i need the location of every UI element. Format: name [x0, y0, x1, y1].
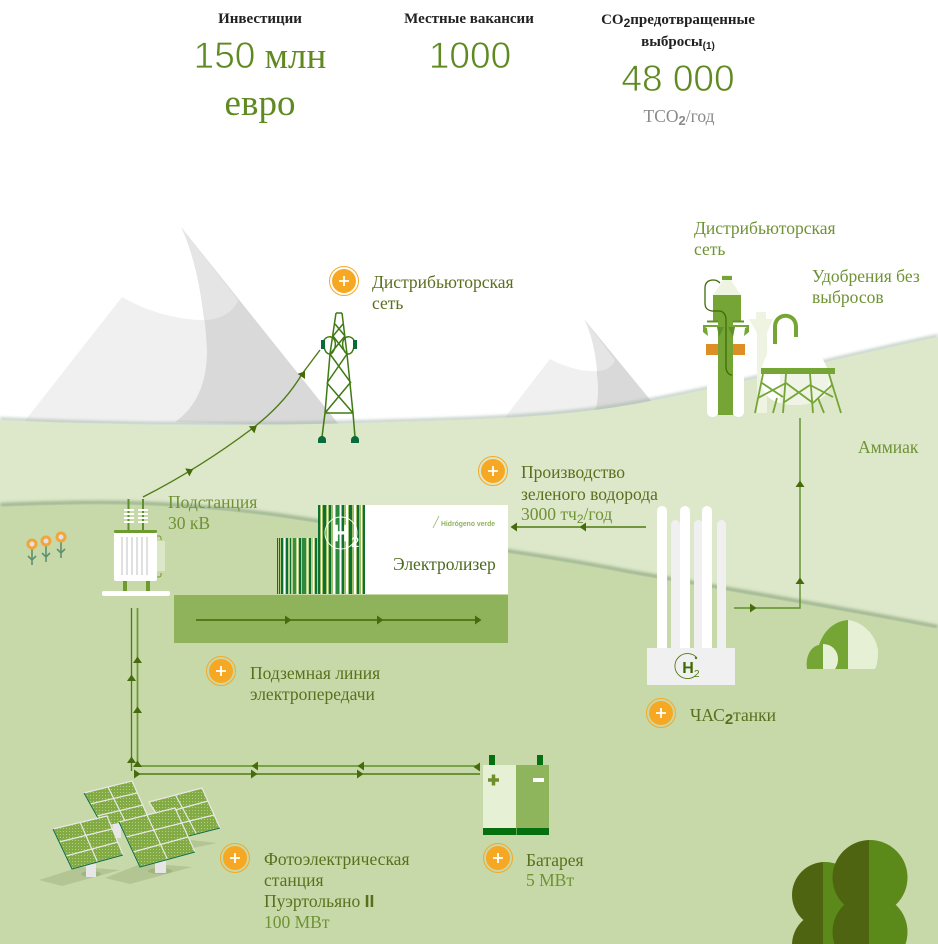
- stat: local jobs: Местные вакансии: [404, 11, 534, 27]
- icon: ammonia column: [703, 275, 749, 417]
- stat: avoided emissions: 2: [678, 113, 686, 128]
- stat: avoided emissions: [601, 12, 755, 128]
- icon: H2 on stripes: 2: [351, 534, 359, 551]
- label: underground line: [250, 663, 380, 704]
- label: battery: [526, 850, 584, 890]
- plus button: underground line: [206, 656, 236, 686]
- mountain: large: [24, 227, 340, 426]
- stat: avoided emissions: (1): [703, 41, 715, 52]
- label: solar plant: [264, 849, 410, 932]
- panel: underground strip: [174, 595, 508, 643]
- stat: avoided emissions: 2: [624, 16, 631, 30]
- icon: bush: [807, 620, 878, 669]
- label: tanks: танки: [733, 705, 776, 725]
- front panel: [119, 808, 195, 874]
- arrow: tanks to ammonia plant: [734, 418, 804, 612]
- label: fertilisers: выбросов: [812, 287, 884, 307]
- label: battery: Батарея: [526, 850, 584, 870]
- icon: H2 on stripes: [325, 517, 359, 551]
- label: battery: 5 МВт: [526, 870, 574, 890]
- icon: trees: [792, 840, 908, 944]
- label: ammonia: Аммиак: [858, 437, 919, 457]
- dark hill: [0, 503, 938, 944]
- icon: H2 on stripes: H: [333, 520, 349, 546]
- icon: battery: [483, 755, 549, 835]
- plus button: battery: [484, 844, 512, 872]
- plus button: hydrogen production: [478, 456, 508, 486]
- icon: hydrogen tanks: H: [682, 660, 694, 677]
- stat: avoided emissions: выбросы: [641, 34, 703, 50]
- label: distribution grid (right): сеть: [694, 239, 725, 259]
- icon: hydrogen tanks: 2: [694, 669, 700, 680]
- arrow: electrolyser to tanks: [510, 522, 646, 532]
- icon: flowers: [26, 532, 66, 565]
- back panel: [84, 781, 148, 838]
- icon: ammonia reactor: [749, 312, 841, 413]
- label: substation: Подстанция: [168, 492, 257, 512]
- label: substation: [168, 492, 257, 533]
- label: hydrogen production: 2: [577, 512, 584, 526]
- stat: avoided emissions: 48 000: [621, 58, 735, 99]
- icon: transmission tower: [318, 313, 359, 443]
- pale hill: [0, 336, 938, 944]
- stat: local jobs: 1000: [429, 35, 511, 76]
- label: hydrogen production: Производство: [521, 462, 625, 482]
- stat: investments: Инвестиции: [218, 11, 302, 27]
- label: hydrogen production: [521, 462, 658, 526]
- label: fertilisers: Удобрения без: [812, 266, 920, 286]
- label: distribution grid: [372, 272, 514, 313]
- label: distribution grid (right): Дистрибьюторская: [694, 218, 836, 238]
- plus button: solar: [220, 844, 250, 872]
- label: solar plant: Пуэртольяно II: [264, 891, 374, 911]
- stat: avoided emissions: ТСО: [644, 106, 678, 126]
- panel: electrolyser: [277, 505, 508, 594]
- label: electrolyser: Электролизер: [393, 554, 496, 574]
- stat: investments: [194, 11, 326, 124]
- brand label: Hidrógeno verde: [441, 519, 495, 528]
- icon: hydrogen tanks: [647, 506, 735, 685]
- stat: local jobs: [404, 11, 534, 76]
- label: solar plant: 100 МВт: [264, 912, 330, 932]
- stat: investments: 150 млн: [194, 35, 326, 77]
- label: solar plant: Фотоэлектрическая: [264, 849, 410, 869]
- label: tanks: 2: [725, 711, 733, 728]
- stat: avoided emissions: /год: [686, 106, 715, 126]
- arrow: substation to tower: [143, 350, 320, 497]
- plus button: tanks: [646, 698, 676, 728]
- label: underground line: электропередачи: [250, 684, 375, 704]
- label: fertilisers: [812, 266, 920, 307]
- stat: avoided emissions: CO: [601, 12, 624, 28]
- icon: solar panels: [39, 781, 220, 886]
- label: underground line: Подземная линия: [250, 663, 380, 683]
- label: substation: 30 кВ: [168, 513, 210, 533]
- icon: transformer: [102, 499, 170, 596]
- label: distribution grid: сеть: [372, 293, 403, 313]
- label: distribution grid (right): [694, 218, 836, 259]
- mountain: small: [503, 319, 655, 420]
- left panel: [53, 816, 123, 877]
- arrows: substation cables: [127, 608, 480, 778]
- label: solar plant: станция: [264, 870, 324, 890]
- stat: avoided emissions: предотвращенные: [630, 12, 755, 28]
- label: tanks: ЧАС: [690, 705, 725, 725]
- right panel: [149, 788, 220, 840]
- label: distribution grid: Дистрибьюторская: [372, 272, 514, 292]
- label: hydrogen production: 3000 тч: [521, 504, 577, 524]
- stat: investments: евро: [225, 83, 295, 124]
- plus button: distribution grid: [330, 266, 358, 296]
- label: hydrogen production: /год: [584, 504, 612, 524]
- label: hydrogen production: зеленого водорода: [521, 484, 658, 504]
